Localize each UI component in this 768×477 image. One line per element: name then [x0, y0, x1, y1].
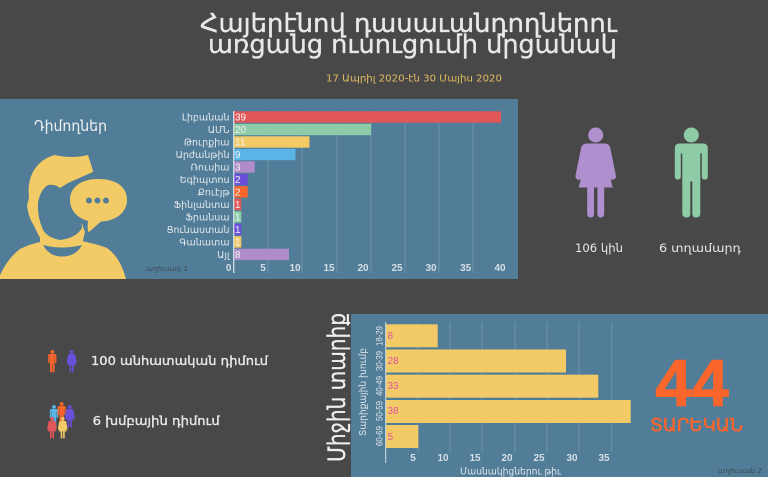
bar values: 1 [235, 200, 241, 211]
bar values: 11 [235, 138, 246, 148]
bar values: 28 [388, 356, 399, 367]
country labels: Լիբանան [182, 112, 230, 124]
label: women count: 106 կին [575, 241, 623, 255]
country labels: Քուէյթ [198, 188, 230, 198]
callout: average age 44 [650, 346, 743, 436]
country labels: Արժանթին [176, 150, 230, 161]
caption: table 1: աղիւսակ 1 [146, 265, 188, 273]
bar chart: countries [166, 111, 506, 274]
x axis ticks: 40 [494, 263, 506, 274]
x axis ticks: 20 [501, 453, 513, 464]
x axis ticks: 5 [260, 263, 266, 274]
heading: average age: Միջին տարիք [323, 313, 351, 462]
country labels: Ռուսիա [191, 162, 230, 174]
bar values: 5 [388, 432, 394, 443]
x axis ticks: 30 [566, 453, 578, 464]
callout: average age 44: ՏԱՐԵԿԱՆ [650, 415, 743, 436]
bar values: 1 [235, 238, 241, 248]
country labels: Այլ [217, 250, 230, 261]
text: group applications: 6 խմբային դիմում [93, 414, 220, 428]
bar values: 2 [235, 175, 241, 186]
x axis ticks: 35 [460, 263, 472, 274]
label: men count: 6 տղամարդ [659, 241, 741, 255]
bar values: 38 [388, 406, 399, 417]
x axis ticks: 35 [598, 453, 610, 464]
age group labels: 30-39 [374, 351, 386, 371]
age group labels: 50-59 [374, 401, 386, 421]
bar values: 39 [235, 112, 247, 124]
heading: applicants: Դիմողներ [34, 117, 107, 135]
text: individual applications: 100 անհատական դիմում [91, 354, 268, 368]
x axis ticks: 10 [437, 453, 449, 464]
title: Հայերէնով դասաւանդողներու [200, 9, 618, 39]
panel: applicants by country [0, 99, 518, 279]
x axis ticks: 5 [410, 453, 416, 464]
title [200, 9, 618, 60]
country labels [166, 112, 230, 261]
icon: individual applicants [48, 350, 77, 372]
title: առցանց ուսուցումի մրցանակ [208, 30, 617, 60]
icon: woman [575, 128, 616, 218]
icon: group applicants [47, 402, 75, 439]
country labels: Ֆրանսա [185, 212, 230, 224]
x axis ticks: 25 [533, 453, 545, 464]
bar values: 9 [235, 150, 241, 161]
age group labels: 40-49 [374, 376, 386, 396]
country labels: Գանատա [179, 238, 230, 248]
country labels: Թուրքիա [184, 138, 230, 148]
age group labels [374, 326, 386, 446]
x axis ticks: 20 [357, 263, 369, 274]
callout: average age 44: 44 [655, 346, 729, 420]
country labels: ԱՄՆ [208, 125, 230, 136]
icon: person with speech bubble [0, 155, 127, 279]
country labels: Եգիպտոս [180, 175, 230, 186]
caption: table 2: աղիւսակ 2 [718, 467, 763, 475]
country labels: Ցունաստան [166, 225, 230, 236]
panel: age distribution [351, 314, 768, 477]
bar values: 3 [235, 162, 241, 174]
bar values: 20 [235, 125, 247, 136]
country labels: Ֆինլանտա [174, 200, 230, 211]
bar chart: age groups [358, 322, 631, 477]
x axis ticks: 30 [425, 263, 437, 274]
x axis ticks [410, 453, 610, 464]
x axis ticks: 15 [323, 263, 335, 274]
bar values: 1 [235, 225, 241, 236]
icon: man [675, 128, 708, 218]
bar values [388, 331, 399, 443]
bar values: 33 [388, 381, 399, 392]
x axis ticks: 10 [289, 263, 301, 274]
bar values: 2 [235, 188, 241, 198]
x axis ticks: 25 [391, 263, 403, 274]
bar values: 1 [235, 212, 241, 224]
bar values: 8 [235, 250, 241, 261]
x axis ticks: 15 [469, 453, 481, 464]
y axis title: Տարիքային խումբ [358, 348, 369, 436]
x axis ticks: 0 [226, 263, 232, 274]
bar values: 8 [388, 331, 394, 342]
age group labels: 18-29 [374, 326, 386, 346]
x axis ticks [226, 263, 506, 274]
subtitle: dates: 17 Ապրիլ 2020-էն 30 Մայիս 2020 [326, 74, 502, 84]
age group labels: 60-69 [374, 426, 386, 446]
bar values [235, 112, 247, 261]
